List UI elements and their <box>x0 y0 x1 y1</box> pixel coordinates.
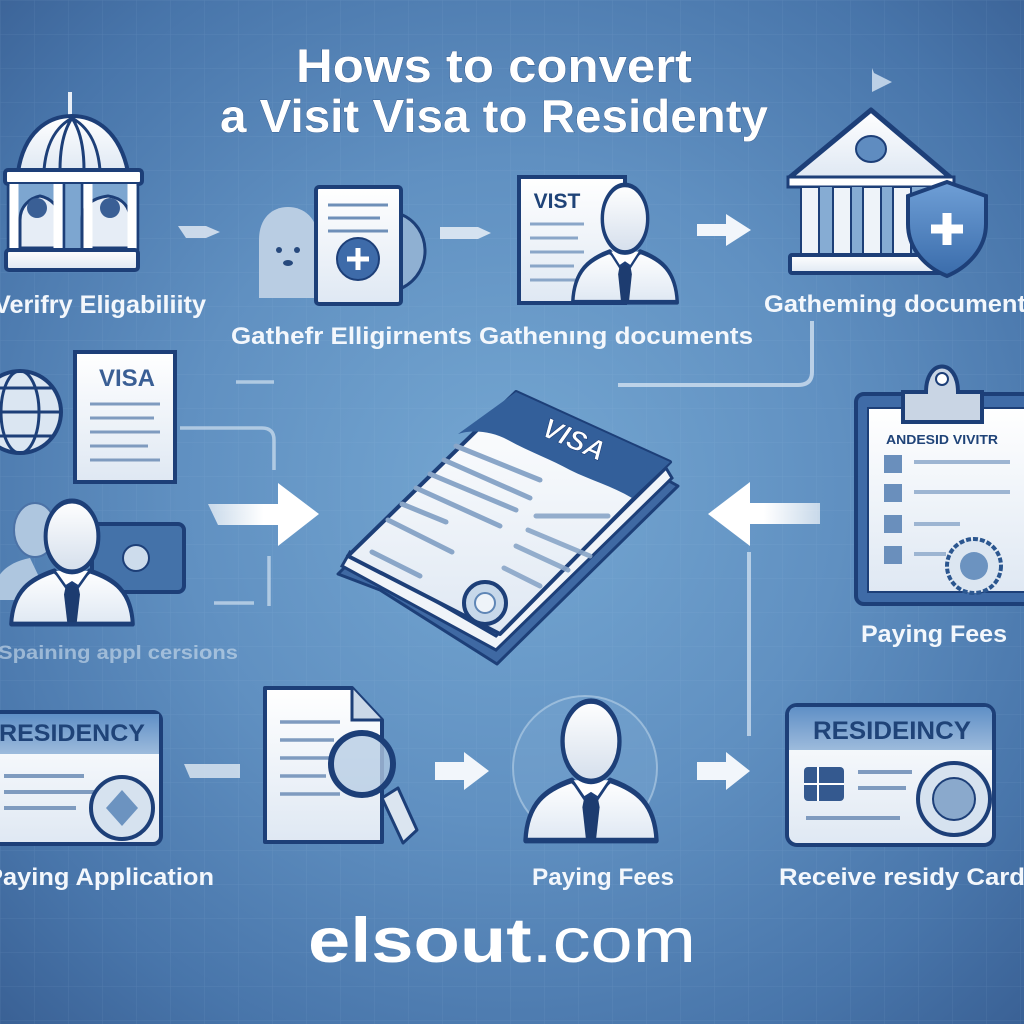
icon: visa document: VISA <box>99 365 155 392</box>
arrow: gather to visit <box>440 227 491 239</box>
label: Receive residency card: Receive residy Card <box>779 864 1024 891</box>
label: Gathering document: Gatheming document <box>764 291 1024 318</box>
icon: residency card right <box>787 705 994 845</box>
icon: government building with people <box>5 92 142 270</box>
arrow: visit to bank <box>697 214 751 246</box>
icon: residency card left <box>0 712 161 844</box>
title: a Visit Visa to Residenty <box>220 90 768 142</box>
icon: central visa booklet <box>338 392 678 664</box>
icon: applicants with card <box>0 501 184 624</box>
icon: visa document <box>75 352 175 482</box>
connector: visa doc elbows <box>180 382 274 606</box>
icon: visit document with person: VIST <box>534 190 581 213</box>
connector: elbow from top right <box>618 321 812 385</box>
arrow: document to person <box>435 752 489 790</box>
icon: clipboard <box>856 366 1024 604</box>
title <box>220 39 768 142</box>
icon: person with halo <box>513 696 657 841</box>
footer: brand: elsout .com <box>308 906 696 976</box>
title: Hows to convert <box>296 39 692 92</box>
icon: residency card left: RESIDENCY <box>0 720 145 747</box>
arrow: from clipboard <box>708 482 820 546</box>
label: Submitting application: Spaining appl cersions <box>0 643 238 664</box>
connector: vertical line bottom right <box>747 552 751 736</box>
label: Paying Fee: Paying Fees <box>861 621 1007 648</box>
icon: document with magnifier <box>265 688 417 843</box>
icon: globe <box>0 371 61 453</box>
label: Paying fees: Paying Fees <box>532 864 674 891</box>
icon: visit document with person <box>519 177 677 303</box>
arrow: verify to gather <box>178 226 220 238</box>
icon: clipboard: ANDESID VIVITR <box>886 432 999 447</box>
label: Verify Eligibility: Verifry Eligabiliity <box>0 291 206 319</box>
icon: bank with shield <box>788 68 986 276</box>
arrow: person to card <box>697 752 750 790</box>
icon: central visa booklet: VISA <box>538 412 610 467</box>
arrow: card to document <box>184 764 240 778</box>
arrow: to central visa <box>208 483 319 546</box>
icon: residency card right: RESIDEINCY <box>813 717 971 745</box>
label: Gather eligibility and documents: Gathefr Elligirnents Gathenıng documents <box>231 323 753 350</box>
icon: document with plus and ghost face <box>259 187 425 304</box>
